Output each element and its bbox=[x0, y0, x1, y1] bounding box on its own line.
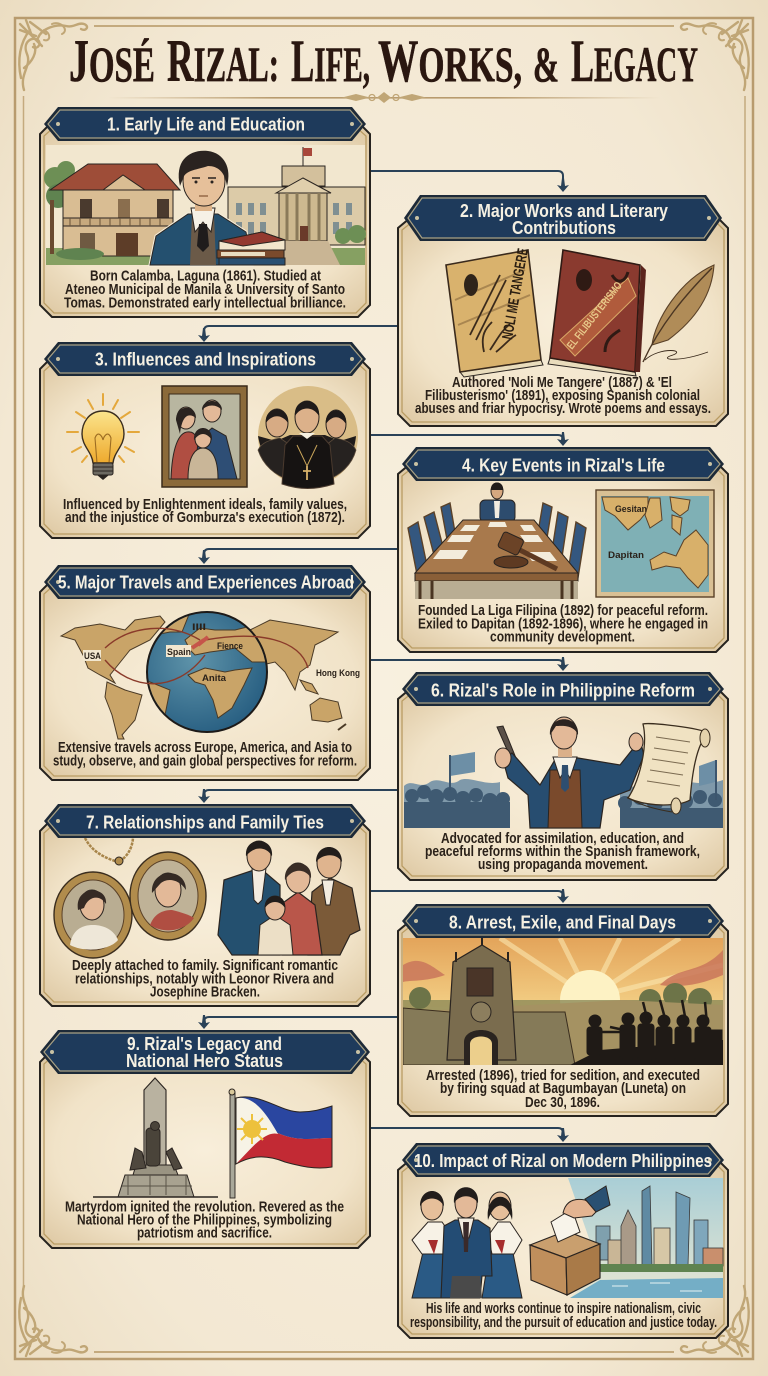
portrait of young Rizal bbox=[150, 151, 252, 265]
university building bbox=[228, 147, 366, 265]
panel 5 description bbox=[53, 740, 357, 770]
panel 4: key events bbox=[398, 464, 728, 652]
panel 10 description bbox=[410, 1301, 717, 1331]
map labels: Anita bbox=[202, 673, 227, 684]
panel 3 description bbox=[63, 497, 347, 526]
panel 7 description bbox=[72, 958, 338, 1000]
connector arrows bbox=[204, 171, 563, 1140]
panel 10: modern impact bbox=[398, 1160, 728, 1338]
title divider ornament bbox=[108, 92, 660, 103]
panel 9 description: Martyrdom ignited the revolution. Revered as the bbox=[65, 1200, 344, 1216]
illustration: city skyline and river bbox=[568, 1178, 723, 1298]
panel 9 description bbox=[65, 1200, 344, 1242]
arrow: 6 to 7 bbox=[204, 790, 398, 801]
illustration: Fort Santiago at sunset with firing squad bbox=[403, 936, 723, 1066]
panel 4 heading: 4. Key Events in Rizal's Life bbox=[462, 454, 665, 476]
panel 5 heading bbox=[44, 565, 366, 599]
panel 8 description bbox=[426, 1068, 700, 1111]
illustration: Noli Me Tangere book: NOLI ME TANGERE bbox=[499, 247, 532, 341]
panel 9 heading bbox=[40, 1030, 370, 1074]
travel route arcs bbox=[105, 628, 308, 684]
panel 8 description: Dec 30, 1896. bbox=[525, 1095, 600, 1111]
panel 2 heading: Contributions bbox=[512, 217, 616, 238]
icon: ballot box and voting hand bbox=[530, 1186, 610, 1295]
panel 1 description: Ateneo Municipal de Manila & University of Santo bbox=[65, 282, 345, 298]
panel 10 heading bbox=[402, 1143, 724, 1177]
panel 7 description: Deeply attached to family. Significant romantic bbox=[72, 958, 338, 974]
panel 8 heading bbox=[402, 904, 724, 938]
panel 8: arrest and final days bbox=[398, 921, 728, 1116]
panel 6 heading bbox=[402, 672, 724, 706]
arrow: 7 to 8 bbox=[370, 891, 563, 901]
title: & bbox=[533, 36, 559, 92]
arrow: 2 to 3 bbox=[204, 326, 398, 339]
arrow: 3 to 4 bbox=[370, 435, 563, 444]
arrowheads bbox=[198, 178, 569, 1142]
panel 4 description: Founded La Liga Filipina (1892) for peaceful reform. bbox=[418, 603, 708, 619]
title: RIZAL: bbox=[167, 28, 279, 94]
arrow: 8 to 9 bbox=[204, 1017, 398, 1027]
panel 6 description bbox=[425, 831, 700, 873]
panel 3: influences bbox=[40, 359, 370, 538]
panel 9 description: National Hero of the Philippines, symbolizing bbox=[77, 1212, 332, 1228]
panel 2: major works bbox=[398, 218, 728, 426]
title: LIFE, bbox=[291, 28, 370, 94]
panel 7 heading: 7. Relationships and Family Ties bbox=[86, 812, 324, 832]
illustration: Rizal family group bbox=[218, 841, 360, 955]
illustration: meeting table and gavel bbox=[408, 482, 586, 599]
panel 6 heading: 6. Rizal's Role in Philippine Reform bbox=[431, 680, 695, 700]
panel 8 heading: 8. Arrest, Exile, and Final Days bbox=[449, 912, 676, 932]
illustration: globe with routes bbox=[140, 612, 268, 732]
arrow: 1 to 2 bbox=[370, 171, 563, 190]
panel 5 description: study, observe, and gain global perspectives for reform. bbox=[53, 754, 357, 770]
illustration: Rizal with pen and scroll bbox=[495, 717, 644, 828]
panel 9 heading: 9. Rizal's Legacy and bbox=[127, 1033, 282, 1054]
panel 1 description: Born Calamba, Laguna (1861). Studied at bbox=[90, 268, 321, 284]
panel 7: relationships bbox=[40, 821, 370, 1006]
panel 2 heading bbox=[404, 195, 722, 241]
panel 3 description: Influenced by Enlightenment ideals, family values, bbox=[63, 497, 347, 513]
stack of books bbox=[217, 232, 285, 265]
map labels: Fience bbox=[217, 641, 243, 652]
panel 9 description: patriotism and sacrifice. bbox=[137, 1226, 272, 1242]
panel 2 description: Authored 'Noli Me Tangere' (1887) & 'El bbox=[452, 375, 672, 391]
panel 1 description bbox=[64, 268, 346, 312]
panel 6: role in reform bbox=[398, 689, 728, 880]
illustration: El Filibusterismo book: EL FILIBUSTERISMO bbox=[565, 280, 625, 352]
illustration: gold chain and double locket bbox=[54, 838, 206, 958]
panel 1: early life bbox=[40, 124, 370, 317]
panel 6 description: Advocated for assimilation, education, and bbox=[441, 831, 684, 847]
icon: light bulb bbox=[67, 394, 139, 480]
illustration: map of Dapitan: Dapitan bbox=[608, 550, 644, 561]
panel 5 description: Extensive travels across Europe, America, and Asia to bbox=[58, 740, 352, 756]
illustration: students and officer bbox=[412, 1187, 522, 1298]
panel 7 description: relationships, notably with Leonor Rivera and bbox=[75, 972, 334, 988]
title: WORKS, bbox=[378, 28, 522, 94]
panel 3 heading: 3. Influences and Inspirations bbox=[95, 348, 316, 370]
panel 2 description bbox=[415, 375, 711, 417]
illustration: Philippine flag bbox=[229, 1089, 332, 1198]
illustration: Noli Me Tangere book bbox=[446, 247, 543, 377]
panel 10 heading: 10. Impact of Rizal on Modern Philippines bbox=[414, 1150, 712, 1171]
illustration: framed family portrait bbox=[162, 386, 247, 487]
panel 2 description: Filibusterismo' (1891), exposing Spanish colonial bbox=[425, 388, 700, 404]
panel 6 description: peaceful reforms within the Spanish framework, bbox=[425, 844, 700, 860]
map labels: USA bbox=[84, 651, 101, 662]
panel 7 heading bbox=[44, 804, 366, 838]
title bbox=[69, 28, 698, 94]
map labels: IIII bbox=[192, 622, 206, 633]
illustration: El Filibusterismo book bbox=[548, 250, 646, 376]
illustration: feather quill bbox=[643, 265, 714, 362]
panel 4 heading bbox=[402, 447, 724, 481]
illustration: Rizal monument bbox=[93, 1078, 218, 1197]
arrow: 4 to 5 bbox=[204, 549, 398, 562]
illustration: three priests of Gomburza bbox=[258, 386, 358, 488]
illustration: world map bbox=[61, 616, 346, 739]
panel 4 description: Exiled to Dapitan (1892-1896), where he engaged in bbox=[418, 616, 708, 632]
panel 1 heading bbox=[44, 107, 366, 141]
panel 5: travels bbox=[40, 582, 370, 780]
icon: scroll document bbox=[627, 724, 710, 814]
panel 4 description: community development. bbox=[490, 630, 635, 646]
arrow: 9 to 10 bbox=[370, 1128, 563, 1140]
panel 8 description: by firing squad at Bagumbayan (Luneta) on bbox=[440, 1081, 686, 1097]
panel 6 description: using propaganda movement. bbox=[478, 857, 648, 873]
arrow: 5 to 6 bbox=[370, 660, 563, 669]
panel 7 description: Josephine Bracken. bbox=[150, 984, 260, 1000]
panel 3 heading bbox=[44, 342, 366, 376]
panel 9 heading: National Hero Status bbox=[126, 1050, 283, 1071]
panel 3 description: and the injustice of Gomburza's execution (1872). bbox=[65, 510, 345, 526]
panel 8 description: Arrested (1896), tried for sedition, and executed bbox=[426, 1068, 700, 1084]
panel 2 heading: 2. Major Works and Literary bbox=[460, 200, 669, 221]
illustration: map of Dapitan: Gesitan bbox=[615, 504, 647, 515]
map labels bbox=[83, 622, 360, 684]
map labels: Hong Kong bbox=[316, 668, 360, 679]
illustration: map of Dapitan bbox=[596, 490, 714, 597]
panel 5 heading: 5. Major Travels and Experiences Abroad bbox=[58, 572, 354, 592]
panel 1 description: Tomas. Demonstrated early intellectual brilliance. bbox=[64, 296, 346, 312]
illustration: house, university and young Rizal bbox=[44, 145, 366, 265]
panel 4 description bbox=[418, 603, 708, 646]
panel 1 heading: 1. Early Life and Education bbox=[107, 114, 305, 134]
map labels: Spain bbox=[167, 647, 191, 658]
title: JOSÉ bbox=[69, 28, 155, 94]
house bbox=[50, 164, 180, 260]
illustration: crowd with flags bbox=[404, 752, 723, 828]
panel 9: legacy bbox=[40, 1052, 370, 1248]
